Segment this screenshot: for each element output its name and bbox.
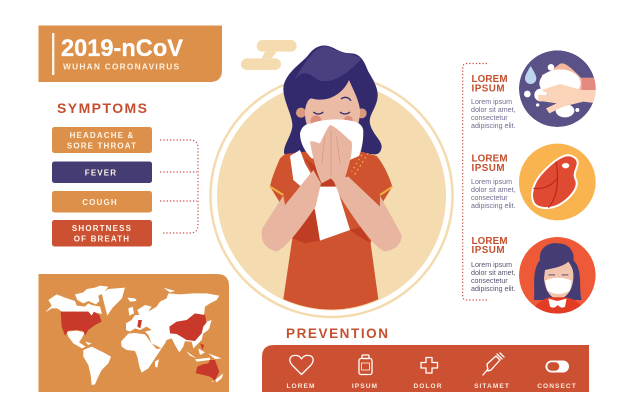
prevention labels: IPSUM [352,383,378,390]
icon: syringe [483,353,504,375]
icon: heart [290,355,313,374]
icon: meat [519,144,596,220]
dress [270,152,392,310]
symptom: cough: COUGH [82,198,118,207]
tip: wash hands: LOREM [472,74,508,85]
tip: wash hands: consectetur [471,114,508,122]
dotted connector: symptoms [160,140,198,233]
hair [283,46,382,154]
yellow trim [270,187,392,195]
scarf [290,150,350,241]
tissue [300,119,363,161]
tip: wear mask: dolor sit amet, [471,269,516,277]
tip: wear mask: IPSUM [472,245,504,256]
tip: wear mask: LOREM [472,236,508,247]
tip: wash hands: dolor sit amet, [471,106,516,114]
prevention heading: PREVENTION [286,326,388,341]
symptoms heading: SYMPTOMS [57,100,147,116]
woman coughing into tissue [262,46,402,310]
prevention labels: DOLOR [413,383,443,390]
hands [310,125,352,185]
tip: cook meat: IPSUM [472,163,504,174]
tip: wash hands: adipiscing elit. [471,122,516,130]
subtitle: WUHAN CORONAVIRUS [63,62,179,72]
world map panel [38,274,229,392]
prevention labels: CONSECT [537,383,577,390]
icon: medicine bottle [359,355,372,374]
tip: wash hands: Lorem ipsum [471,98,512,106]
icon: medical cross [421,358,438,373]
tip: cook meat: dolor sit amet, [471,186,516,194]
title panel [38,26,222,82]
tip: cook meat: Lorem ipsum [471,178,512,186]
central circle [210,75,452,317]
symptom: shortness of breath: SHORTNESS [72,224,132,233]
symptom: shortness of breath: OF BREATH [74,234,130,244]
prevention labels: SITAMET [474,383,510,390]
tip: cook meat [471,144,596,220]
symptom: headache and sore throat: HEADACHE & [70,131,134,140]
arms [262,170,321,252]
tip: wash hands [471,50,597,130]
tip: wash hands: IPSUM [472,84,504,94]
icon: washing hands [519,50,597,127]
tip: cook meat: adipiscing elit. [471,202,516,210]
tip: wear mask: adipiscing elit. [471,285,516,293]
prevention labels [286,383,577,390]
symptoms list [52,127,152,246]
icon: woman wearing mask [519,237,596,317]
world map [45,286,223,385]
symptom: headache and sore throat [52,127,152,153]
symptom: fever: FEVER [85,168,117,178]
icon: toggle [546,360,569,372]
tip: wear mask [471,236,596,317]
prevention labels: LOREM [286,383,316,390]
dotted connector: prevention tips [463,64,487,300]
title: 2019-nCoV [61,35,184,62]
prevention panel [262,345,589,392]
decorative cloud [241,40,297,70]
tip: wear mask: consectetur [471,277,508,285]
symptom: headache and sore throat: SORE THROAT [67,142,137,150]
ears and face [296,108,306,118]
tip: wear mask: Lorem ipsum [471,261,512,269]
symptom: shortness of breath [52,220,152,246]
tip: cook meat: consectetur [471,194,508,202]
tip: cook meat: LOREM [472,154,508,165]
